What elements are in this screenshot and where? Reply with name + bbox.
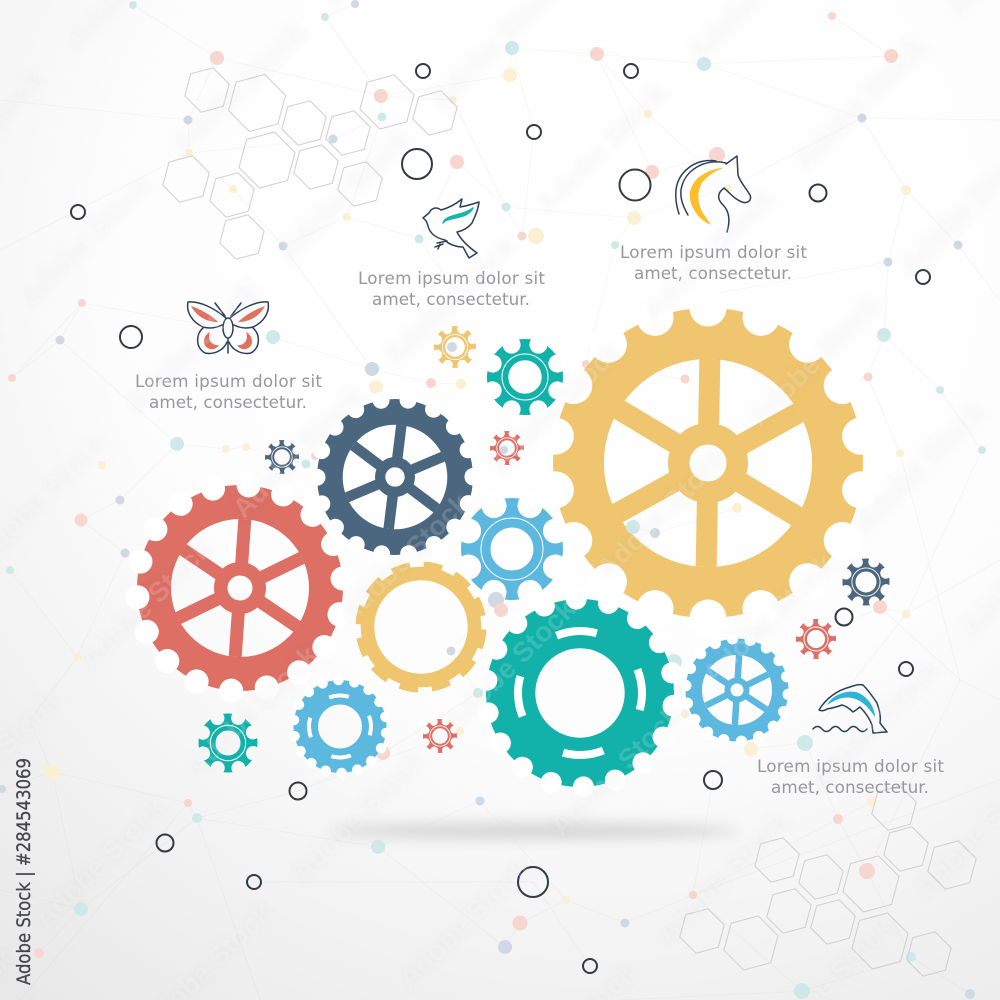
icon: dolphin (813, 685, 887, 733)
gear: large teal with arc slots (511, 624, 649, 762)
gear: small red right (802, 624, 830, 654)
icon: horse (676, 156, 751, 232)
gear: yellow ring with square teeth (356, 562, 486, 692)
gear: large yellow spoked (578, 334, 838, 592)
hexagon cluster top left (163, 68, 457, 259)
icon: bird (423, 199, 479, 258)
gear: small red bottom (428, 724, 452, 748)
open ring decorations (71, 64, 930, 973)
caption: bird: Lorem ipsum dolor sit (358, 268, 545, 288)
gear: teal eight-tooth (498, 350, 552, 404)
caption: dolphin: amet, consectetur. (771, 777, 929, 797)
hexagon cluster bottom right (680, 786, 976, 976)
gear: blue eight-tooth (476, 513, 548, 585)
caption: butterfly: Lorem ipsum dolor sit (135, 371, 322, 391)
caption: horse: amet, consectetur. (634, 263, 792, 283)
gear: dark blue spoked (330, 412, 460, 542)
caption: butterfly: amet, consectetur. (149, 392, 307, 412)
gear: red spoked (154, 502, 326, 674)
icon: butterfly (188, 302, 268, 353)
ground shadow (330, 823, 740, 839)
gear: small yellow (440, 332, 470, 362)
white halo behind gear notches (114, 283, 888, 799)
dots seen through the gear openings (447, 342, 660, 617)
gear: small dark blue right (849, 565, 883, 599)
caption: dolphin: Lorem ipsum dolor sit (757, 756, 944, 776)
gear: blue spoked (694, 647, 780, 733)
gear: blue with arc slots (306, 692, 374, 761)
caption: horse: Lorem ipsum dolor sit (620, 242, 807, 262)
stock id text: Adobe Stock | #284543069 (13, 758, 35, 985)
gear: teal eight-tooth bottom (207, 722, 249, 764)
gear: small dark blue left (270, 445, 294, 469)
caption: bird: amet, consectetur. (372, 289, 530, 309)
gear: small red centre (495, 436, 519, 460)
